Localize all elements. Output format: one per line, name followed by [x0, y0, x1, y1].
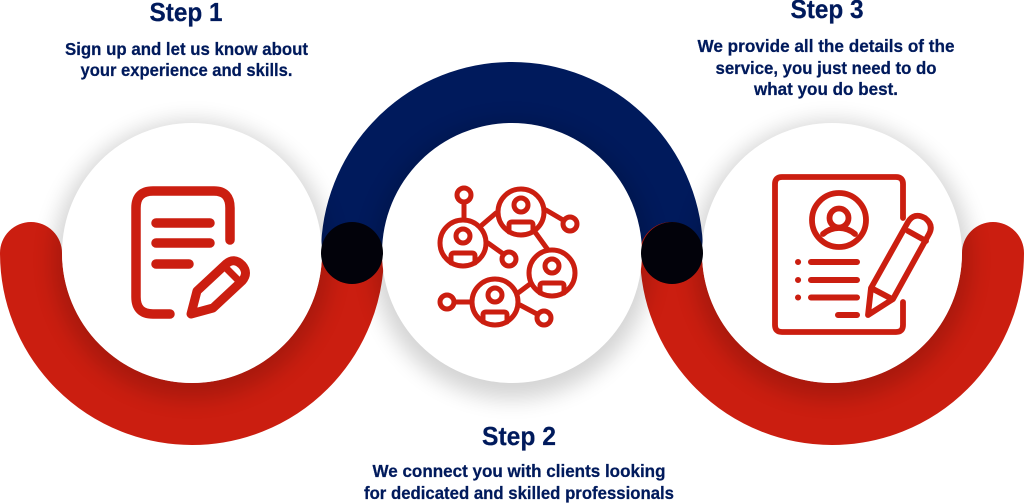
text: step 2 description: We connect you with clients looking — [372, 461, 666, 481]
text: step 3 description: service, you just need to do — [716, 58, 936, 78]
shadow: left circle — [53, 121, 331, 399]
black joint: right — [641, 222, 703, 284]
red arc: right — [671, 253, 993, 414]
shadow: middle circle — [373, 121, 651, 399]
text: step 2 description — [364, 461, 674, 503]
icon: profile document with pencil — [775, 177, 931, 332]
text: step 3 description — [698, 36, 955, 99]
shadow: right circle — [693, 121, 971, 399]
red arc: left — [31, 253, 353, 414]
text: step 3 description: what you do best. — [753, 79, 898, 99]
white circle: right — [702, 123, 962, 383]
icon: document with pencil — [136, 191, 246, 314]
text: step 1 description: Sign up and let us know about — [65, 39, 308, 59]
heading: step 2: Step 2 — [482, 421, 556, 451]
text: step 3 description: We provide all the details of the — [698, 36, 955, 56]
text: step 1 description: your experience and skills. — [80, 60, 292, 80]
white circle: middle — [382, 123, 642, 383]
black joint: left — [321, 222, 383, 284]
text: step 1 description — [65, 39, 308, 80]
navy arc: middle — [352, 93, 672, 253]
icon: connected people network — [440, 188, 577, 325]
white circle: left — [62, 123, 322, 383]
text: step 2 description: for dedicated and skilled professionals — [364, 483, 674, 503]
